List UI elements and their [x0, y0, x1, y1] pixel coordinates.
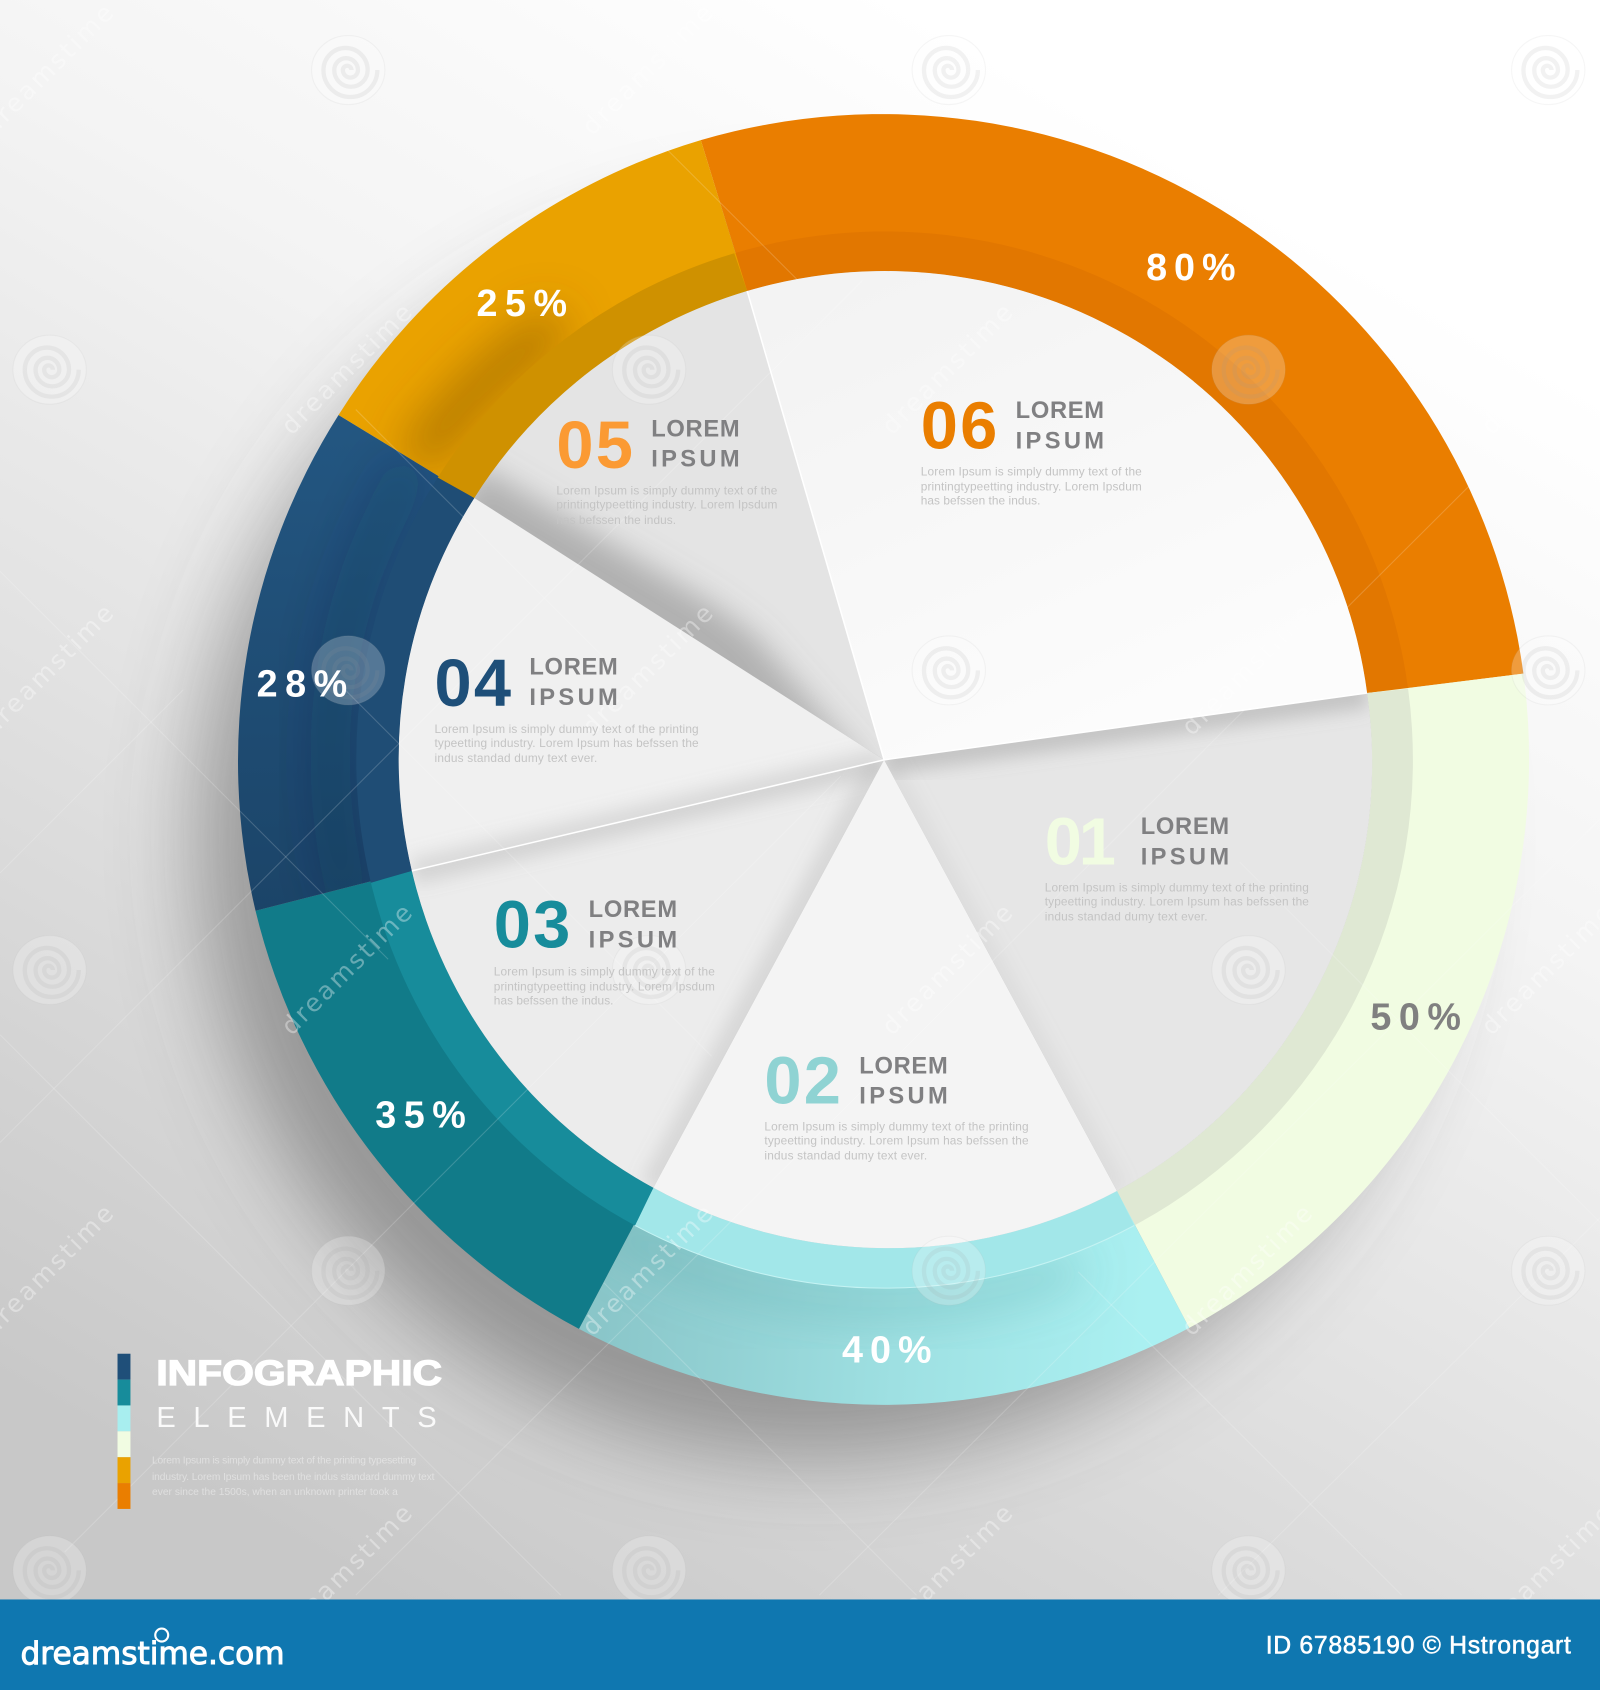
text block 05: 05 — [556, 409, 633, 483]
text block 06: has befssen the indus. — [921, 493, 1040, 507]
watermark wordmarks: dreamstime — [1176, 1199, 1318, 1341]
watermark wordmarks: dreamstime — [876, 1499, 1018, 1641]
footer logo wordmark: dreamstime.com — [20, 1636, 285, 1672]
watermark wordmarks: dreamstime — [576, 0, 719, 141]
wedge edge highlight — [412, 291, 1367, 871]
watermark wordmarks: dreamstime — [576, 599, 719, 741]
text block 01: typeetting industry. Lorem Ipsum has befssen the — [1045, 894, 1309, 908]
legend description: ever since the 1500s, when an unknown printer took a — [152, 1487, 398, 1498]
text block 02: indus standad dumy text ever. — [764, 1149, 927, 1163]
text block 04: Lorem Ipsum is simply dummy text of the printing — [435, 722, 699, 736]
text block 03: 03 — [494, 888, 570, 962]
text block 03: LOREM — [589, 897, 677, 923]
text block 03: IPSUM — [589, 927, 677, 953]
text block 04: 04 — [435, 647, 511, 721]
text block 01: IPSUM — [1141, 844, 1229, 870]
outer ring — [238, 114, 1529, 1405]
percent labels — [257, 246, 1461, 1370]
text block 02: 02 — [764, 1045, 841, 1119]
footer image id credit: ID 67885190 © Hstrongart — [1266, 1632, 1571, 1659]
watermark wordmarks: dreamstime — [576, 1199, 719, 1341]
wedge 05 panel — [474, 291, 883, 759]
text block 02: typeetting industry. Lorem Ipsum has befssen the — [764, 1134, 1029, 1148]
text block 04: LOREM — [529, 655, 618, 681]
legend description: industry. Lorem Ipsum has been the indus standard dummy text — [152, 1472, 435, 1483]
text block 02: Lorem Ipsum is simply dummy text of the printing — [764, 1120, 1029, 1134]
label 80%: 80% — [1146, 246, 1236, 288]
watermark wordmarks: dreamstime — [876, 298, 1018, 440]
watermark wordmarks: dreamstime — [1176, 599, 1318, 741]
ring segment: yellow 25% — [339, 140, 747, 498]
text block 03 — [494, 888, 715, 1008]
wedge 02 panel — [653, 760, 1117, 1248]
ring segment: navy 28% — [238, 415, 474, 911]
ring segment: light cyan 40% — [579, 1188, 1189, 1405]
text block 05: IPSUM — [651, 447, 740, 473]
wedge 04 panel — [399, 498, 884, 871]
text block 06: 06 — [921, 389, 997, 463]
text block 04: IPSUM — [529, 685, 618, 711]
legend description — [152, 1456, 435, 1498]
watermark wordmarks: dreamstime — [275, 298, 418, 440]
ring segment: teal 35% — [256, 871, 653, 1329]
label 28%: 28% — [257, 662, 347, 704]
text block 05: Lorem Ipsum is simply dummy text of the — [556, 484, 778, 498]
text block 05 — [556, 409, 778, 527]
text block 01: indus standad dumy text ever. — [1045, 909, 1208, 923]
text block 05: printingtypeetting industry. Lorem Ipsdum — [556, 498, 777, 512]
text block 01: 01 — [1045, 805, 1116, 879]
wedge 06 panel — [747, 271, 1367, 760]
text block 02: IPSUM — [859, 1084, 948, 1110]
text block 06 — [921, 389, 1142, 507]
heading: infographic elements: INFOGRAPHIC — [156, 1353, 442, 1393]
label 35%: 35% — [375, 1093, 466, 1135]
label 40%: 40% — [842, 1328, 932, 1370]
text block 04: indus standad dumy text ever. — [435, 751, 597, 765]
text block 05: has befssen the indus. — [556, 513, 676, 527]
watermark wordmarks: dreamstime — [876, 898, 1018, 1041]
text block 01: LOREM — [1141, 814, 1229, 840]
footer banner — [0, 1599, 1600, 1690]
text block 05: LOREM — [651, 417, 740, 443]
text block 06: Lorem Ipsum is simply dummy text of the — [921, 464, 1142, 478]
heading: infographic elements — [156, 1353, 442, 1434]
watermark wordmarks: dreamstime — [275, 898, 418, 1041]
legend colour bar — [118, 1354, 130, 1509]
text block 01: Lorem Ipsum is simply dummy text of the printing — [1045, 880, 1309, 894]
text block 03: Lorem Ipsum is simply dummy text of the — [494, 964, 715, 978]
ring segment: pale green 50% — [1117, 674, 1529, 1328]
text block 04: typeetting industry. Lorem Ipsum has befssen the — [435, 736, 699, 750]
text block 06: LOREM — [1016, 398, 1104, 424]
text block 02: LOREM — [859, 1053, 948, 1079]
legend description: Lorem Ipsum is simply dummy text of the printing typesetting — [152, 1456, 416, 1467]
watermark wordmarks: dreamstime — [275, 1499, 418, 1641]
text block 03: has befssen the indus. — [494, 994, 613, 1008]
text block 03: printingtypeetting industry. Lorem Ipsdum — [494, 980, 715, 994]
watermark wordmarks: dreamstime — [1176, 0, 1318, 141]
text block 01 — [1045, 805, 1309, 923]
wedge 03 panel — [412, 760, 884, 1188]
label 50%: 50% — [1370, 995, 1461, 1037]
ring segment: orange 80% — [701, 114, 1523, 693]
text block 06: IPSUM — [1016, 428, 1104, 454]
wedge 01 panel — [884, 693, 1372, 1191]
heading: infographic elements: ELEMENTS — [156, 1402, 437, 1434]
pie drop shadow — [196, 212, 1443, 1458]
text block 02 — [764, 1045, 1029, 1163]
text block 06: printingtypeetting industry. Lorem Ipsdum — [921, 479, 1142, 493]
label 25%: 25% — [477, 282, 567, 324]
text block 04 — [435, 647, 699, 765]
